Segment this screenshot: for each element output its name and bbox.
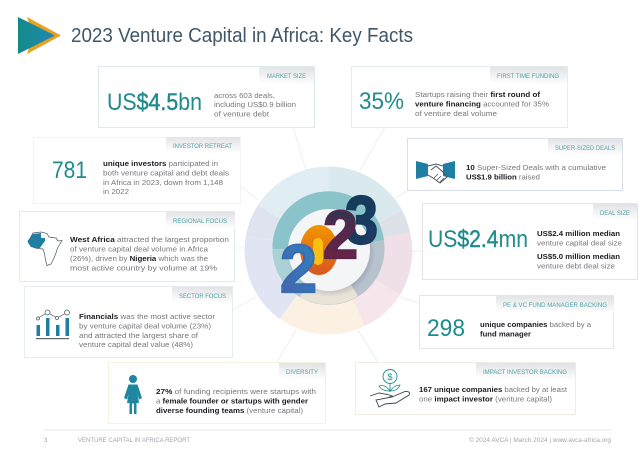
description: 167 unique companies backed by at least bbox=[419, 385, 568, 394]
panel: sector focus: SECTOR FOCUS bbox=[179, 293, 226, 300]
description: US$1.9 billion raised bbox=[466, 172, 540, 182]
description bbox=[70, 235, 229, 272]
description: 10 Super-Sized Deals with a cumulative bbox=[466, 163, 606, 172]
description: Startups raising their first round of bbox=[415, 90, 540, 99]
description: of venture debt bbox=[214, 110, 270, 118]
year digits: 2 bbox=[280, 231, 317, 307]
stat: 35% bbox=[359, 88, 404, 115]
stat: US$4.5bn bbox=[107, 89, 202, 116]
panel: super-sized deals: SUPER-SIZED DEALS bbox=[555, 145, 615, 152]
description: of venture capital deal volume in Africa bbox=[70, 244, 209, 254]
description bbox=[419, 385, 568, 404]
central 2023 graphic bbox=[245, 166, 412, 334]
stat: US$2.4mn bbox=[428, 226, 528, 253]
stat: 781 bbox=[52, 157, 87, 184]
icon: Africa map bbox=[28, 232, 62, 266]
description bbox=[156, 387, 316, 415]
icon: hand with plant: $ bbox=[388, 372, 393, 382]
description: West Africa attracted the largest proportion bbox=[70, 235, 229, 244]
description: venture financing accounted for 35% bbox=[415, 100, 549, 108]
description: Financials was the most active sector bbox=[79, 312, 215, 321]
panel: first time funding: FIRST TIME FUNDING bbox=[497, 73, 559, 80]
description: (26%), driven by Nigeria which was the bbox=[70, 254, 208, 263]
description bbox=[415, 90, 549, 118]
inner ring bbox=[272, 191, 384, 305]
year digits: 2 bbox=[323, 197, 358, 273]
description: including US$0.9 billion bbox=[214, 100, 296, 109]
page number: 3 bbox=[44, 438, 48, 444]
description: by venture capital deal volume (23%) bbox=[79, 322, 211, 330]
title: 2023 Venture Capital in Africa: Key Facts bbox=[71, 25, 413, 47]
panel: investor retreat: INVESTOR RETREAT bbox=[173, 143, 232, 150]
description bbox=[466, 163, 606, 182]
description: in 2022 bbox=[103, 187, 129, 196]
description: venture capital deal size bbox=[537, 238, 622, 248]
description: one impact investor (venture capital) bbox=[419, 394, 552, 404]
year digits bbox=[280, 182, 378, 307]
description: and attracted the largest share of bbox=[79, 331, 199, 340]
description bbox=[103, 159, 229, 196]
icon: handshake bbox=[416, 161, 455, 183]
description: fund manager bbox=[480, 330, 531, 338]
panel: investor retreat bbox=[34, 137, 240, 204]
panel: first time funding bbox=[352, 66, 568, 128]
description: a female founder or startups with gender bbox=[156, 396, 308, 406]
icon: bar chart bbox=[36, 310, 70, 339]
description: diverse founding teams (venture capital) bbox=[156, 406, 303, 415]
panel: deal size bbox=[422, 204, 638, 280]
panel: regional focus: REGIONAL FOCUS bbox=[173, 218, 227, 225]
description: venture debt deal size bbox=[537, 262, 615, 270]
description bbox=[480, 320, 592, 338]
panel: deal size: DEAL SIZE bbox=[600, 210, 630, 217]
description: unique investors participated in bbox=[103, 159, 218, 168]
description: venture capital deal value (48%) bbox=[79, 340, 193, 349]
year digits: 3 bbox=[345, 182, 378, 258]
panel: super-sized deals bbox=[408, 138, 622, 190]
description bbox=[214, 91, 296, 118]
icon: hand with plant bbox=[370, 370, 410, 407]
panel: market size bbox=[98, 66, 314, 128]
panel: impact investor backing bbox=[356, 362, 576, 414]
outer segmented ring bbox=[245, 166, 412, 334]
panel: regional focus bbox=[20, 212, 235, 282]
description: US$2.4 million median bbox=[537, 229, 620, 238]
footer bbox=[44, 430, 611, 444]
description: US$5.0 million median bbox=[537, 252, 620, 261]
stat: 298 bbox=[427, 315, 465, 342]
description bbox=[79, 312, 215, 349]
panel: market size: MARKET SIZE bbox=[267, 73, 306, 80]
copyright: © 2024 AVCA | March 2024 | www.avca-africa.org bbox=[469, 437, 611, 444]
description: of venture deal volume bbox=[415, 109, 497, 118]
description: both venture capital and debt deals bbox=[103, 168, 229, 178]
description: unique companies backed by a bbox=[480, 320, 592, 329]
description: across 603 deals, bbox=[214, 91, 275, 100]
description: 27% of funding recipients were startups with bbox=[156, 387, 316, 396]
description bbox=[537, 229, 622, 270]
panel: diversity: DIVERSITY bbox=[286, 369, 318, 376]
report name: VENTURE CAPITAL IN AFRICA REPORT bbox=[78, 438, 190, 444]
panel: diversity bbox=[108, 362, 326, 424]
icon: woman bbox=[124, 375, 142, 414]
description: most active country by volume at 19% bbox=[70, 264, 217, 272]
panel: PE and VC fund manager backing: PE & VC FUND MANAGER BACKING bbox=[503, 302, 607, 309]
panel: PE and VC fund manager backing bbox=[420, 296, 614, 348]
description: in Africa in 2023, down from 1,148 bbox=[103, 178, 223, 187]
logo bbox=[18, 17, 61, 54]
panel: sector focus bbox=[24, 286, 232, 358]
panel: impact investor backing: IMPACT INVESTOR BACKING bbox=[483, 369, 567, 376]
connector lines bbox=[232, 127, 422, 362]
